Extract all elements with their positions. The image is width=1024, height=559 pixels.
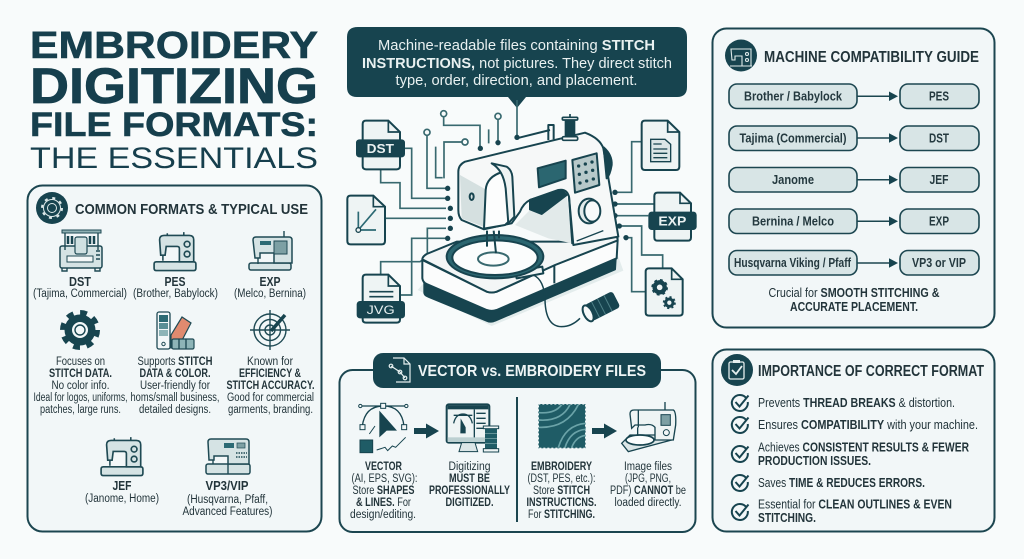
item: consistent results: PRODUCTION ISSUES. (758, 454, 871, 468)
keypad buttons (577, 160, 595, 185)
icon: solid gear (63, 313, 97, 347)
format VP3/VIP (182, 478, 273, 518)
item: compatibility: Ensures COMPATIBILITY with your machine. (758, 418, 978, 432)
column: embroidery text: EMBROIDERY (531, 461, 592, 473)
file icon: EXP (648, 193, 697, 241)
description: PES (130, 356, 220, 416)
file icon: DST: DST (367, 142, 394, 156)
panel: importance of correct format (712, 350, 994, 532)
icon: vector file (389, 358, 410, 382)
description: EXP: EFFICIENCY & (239, 368, 301, 380)
column: embroidery text: Store STITCH (533, 485, 590, 497)
thread spool on cord (580, 291, 620, 323)
icon: gear badge (36, 192, 68, 224)
column: vector text: Store SHAPES (352, 485, 415, 497)
panel: vector vs embroidery files (340, 353, 696, 532)
item: clean outlines: STITCHING. (758, 511, 816, 525)
description: PES: Supports STITCH (138, 356, 212, 368)
file icon: EXP: EXP (658, 214, 687, 228)
panel: common formats and typical use (28, 186, 322, 532)
footer note: ACCURATE PLACEMENT. (790, 300, 918, 314)
icon: machine badge (725, 40, 757, 72)
description: DST (34, 356, 128, 416)
column: digitizing text: MUST BE (449, 473, 490, 485)
title: DIGITIZING (30, 58, 318, 114)
callout: definition (347, 27, 687, 108)
item: thread breaks: Prevents THREAD BREAKS & distortion. (758, 396, 955, 410)
column: image files text: PDF) CANNOT be (610, 485, 686, 497)
machine body (458, 125, 618, 245)
description: PES: detailed designs. (139, 404, 211, 416)
description: EXP (226, 356, 314, 416)
format VP3/VIP: Advanced Features) (182, 506, 273, 518)
column: image files text: loaded directly. (614, 497, 682, 509)
file icon: JVG: JVG (367, 303, 395, 317)
column: embroidery text: INSTRUCTICNS. (526, 497, 596, 509)
callout: definition: type, order, direction, and placement. (396, 72, 638, 89)
panel: machine compatibility guide (712, 28, 994, 328)
format JEF: JEF (112, 478, 132, 493)
column: image files text: (JPG, PNG, (625, 473, 671, 485)
callout: definition: Machine-readable files containing STITCH (378, 37, 655, 54)
header banner: VECTOR vs. EMBROIDERY FILES (418, 363, 646, 380)
row: Janome to JEF (729, 168, 979, 192)
column: vector text: & LINES. For (356, 497, 411, 509)
file icon: JVG (357, 275, 405, 323)
panel heading: COMMON FORMATS & TYPICAL USE (75, 201, 308, 218)
thread spool on top (562, 114, 578, 140)
file icon: vector graph (347, 196, 385, 244)
description: DST: patches, large runs. (40, 404, 121, 416)
arrow (414, 424, 439, 438)
icon: multi-head machine DST (60, 230, 102, 271)
description: PES: homs/small business, (130, 392, 220, 404)
illustration: sewing machine (418, 114, 623, 327)
row: Janome to JEF: JEF (930, 173, 949, 187)
format DST: DST (69, 275, 91, 289)
file icon: DST (356, 121, 405, 169)
panel heading: MACHINE COMPATIBILITY GUIDE (764, 49, 979, 66)
format DST (33, 275, 127, 300)
row: Bernina to EXP (729, 209, 979, 234)
column: embroidery text: For STITCHING. (528, 509, 595, 521)
footer note: Crucial for SMOOTH STITCHING & (768, 286, 940, 300)
footer note (768, 286, 940, 314)
column: image files text (610, 461, 686, 509)
row: Brother to PES: Brother / Babylock (744, 90, 842, 104)
icon: clipboard check badge (721, 354, 753, 386)
format EXP: (Melco, Bernina) (234, 288, 306, 300)
item: time and errors: Saves TIME & REDUCES ERRORS. (758, 476, 925, 490)
column: vector text: (AI, EPS, SVG): (352, 473, 418, 485)
format EXP (234, 275, 306, 300)
row: Tajima to DST: DST (929, 132, 949, 146)
row: Brother to PES: PES (929, 90, 949, 104)
format VP3/VIP: VP3/VIP (206, 478, 249, 493)
icon: target with needle (250, 310, 290, 350)
row: Tajima to DST: Tajima (Commercial) (740, 132, 846, 146)
icon: computerized machine EXP (249, 231, 292, 270)
icon: computerized machine VP3 (206, 439, 250, 474)
row: Husqvarna to VP3 or VIP: VP3 or VIP (912, 256, 966, 270)
icon: machine with hoop (622, 402, 676, 452)
column: embroidery text: (DST, PES, etc.): (528, 473, 596, 485)
icon: sewing machine JEF (101, 437, 143, 476)
description: EXP: STITCH ACCURACY. (226, 380, 314, 392)
description: EXP: Known for (247, 356, 293, 368)
file icon: settings gears (646, 268, 683, 316)
item: clean outlines: Essential for CLEAN OUTLINES & EVEN (758, 498, 952, 512)
column: image files text: Image files (624, 461, 672, 473)
row: Bernina to EXP: Bernina / Melco (752, 214, 834, 228)
item: clean outlines (732, 498, 952, 525)
description: EXP: Good for commercial (227, 392, 314, 404)
machine base (418, 236, 623, 326)
format VP3/VIP: (Husqvarna, Pfaff, (187, 494, 268, 506)
description: EXP: garments, branding. (228, 404, 313, 416)
description: PES: User-friendly for (140, 380, 210, 392)
icon: vector pen tool (359, 403, 408, 453)
column: digitizing text: DIGITIZED. (446, 497, 494, 509)
description: DST: Ideal for logos, uniforms, (34, 392, 128, 404)
column: vector text: design/editing. (350, 509, 416, 521)
row: Janome to JEF: Janome (772, 173, 814, 187)
row: Husqvarna to VP3 or VIP: Husqvarna Viking / Pfaff (734, 256, 852, 270)
title: FILE FORMATS: (30, 106, 318, 144)
item: consistent results (732, 440, 969, 468)
column: embroidery text (526, 461, 596, 521)
column: vector text: VECTOR (365, 461, 403, 473)
callout: definition: INSTRUCTIONS, not pictures. They direct stitch (362, 55, 672, 72)
file icons (347, 121, 697, 323)
format PES: PES (164, 275, 186, 289)
icon: embroidered fabric (538, 404, 586, 448)
embroidery hoop (447, 231, 580, 327)
format EXP: EXP (260, 275, 280, 289)
item: consistent results: Achieves CONSISTENT RESULTS & FEWER (758, 440, 969, 454)
title (30, 25, 318, 175)
title: EMBROIDERY (30, 25, 318, 67)
icon: colour swatch fan (157, 312, 194, 349)
row: Brother to PES (729, 84, 979, 108)
description: DST: Focuses on (56, 356, 105, 368)
icon: sewing machine PES (154, 232, 196, 271)
format PES: (Brother, Babylock) (133, 288, 218, 300)
format DST: (Tajima, Commercial) (33, 288, 127, 300)
column: digitizing text (429, 461, 510, 509)
description: DST: STITCH DATA. (49, 368, 112, 380)
header banner (373, 353, 661, 388)
connector lines (381, 100, 663, 295)
arrow (592, 424, 617, 438)
row: Husqvarna to VP3 or VIP (729, 250, 979, 275)
description: DST: No color info. (52, 380, 110, 392)
icon: monitor with thread spool (447, 404, 499, 452)
row: Tajima to DST (729, 126, 979, 150)
column: digitizing text: PROFESSIONALLY (429, 485, 510, 497)
format PES (133, 275, 218, 300)
column: vector text (350, 461, 418, 521)
item: time and errors (732, 475, 925, 491)
title: THE ESSENTIALS (30, 142, 318, 175)
description: PES: DATA & COLOR. (140, 368, 210, 380)
column: digitizing text: Digitizing (448, 461, 490, 473)
format JEF: (Janome, Home) (85, 493, 159, 505)
file icon: document (642, 121, 679, 170)
row: Bernina to EXP: EXP (929, 214, 949, 228)
format JEF (85, 478, 159, 505)
